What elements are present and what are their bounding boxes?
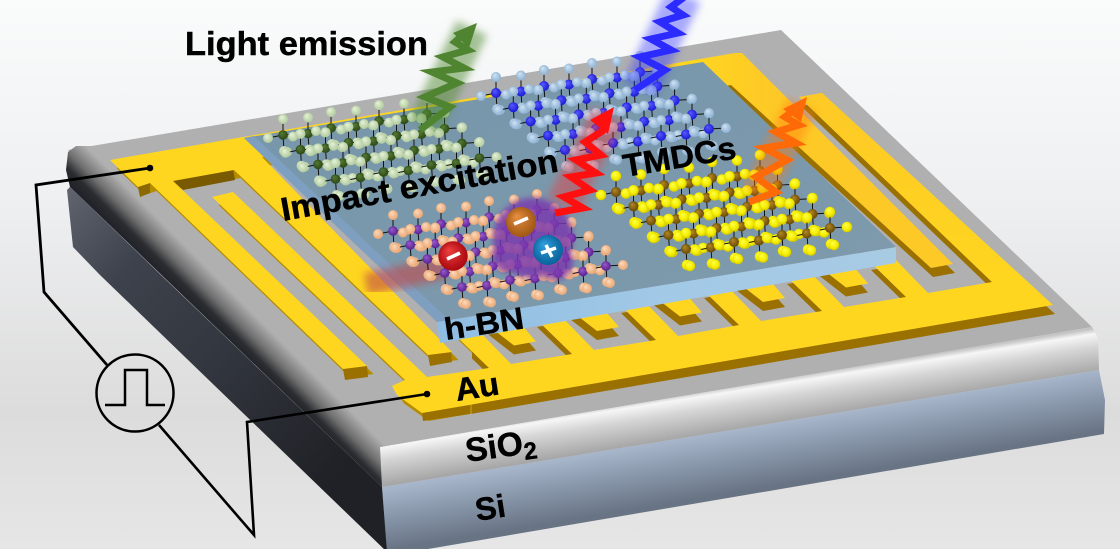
TMDC lattice: orange and purple [373,189,628,309]
charge: electron orange [506,207,536,237]
Si layer [67,187,1105,549]
h-BN layer [244,62,896,343]
arrow: green emission [420,23,477,130]
label: h-BN: h-BN [442,300,526,347]
label: TMDCs: TMDCs [620,130,739,184]
TMDC lattice: blue [476,51,731,172]
circuit wires [36,165,430,535]
gold electrode: left comb [110,53,960,380]
arrow: blue emission [635,0,687,90]
SiO2 layer [66,30,1099,487]
label: Si: Si [472,488,508,528]
electrode finger tips [487,262,868,354]
arrow: red emission [555,107,614,213]
TMDC lattice: green [263,93,502,201]
red excitation beam [366,268,445,284]
icon: pulse generator [96,354,174,432]
label: SiO2: SiO [463,425,525,470]
charge: hole blue [533,235,563,265]
label: SiO2: 2 [522,437,539,466]
label: Impact excitation: Impact excitation [278,142,561,228]
arrow: orange emission [749,97,807,202]
exciton purple cloud [492,198,573,280]
gold electrode: front comb [212,93,1060,422]
title: Light emission: Light emission [185,25,428,62]
label: Au: Au [452,365,502,408]
charge: electron red [438,241,468,271]
TMDC lattice: yellow [596,150,852,271]
